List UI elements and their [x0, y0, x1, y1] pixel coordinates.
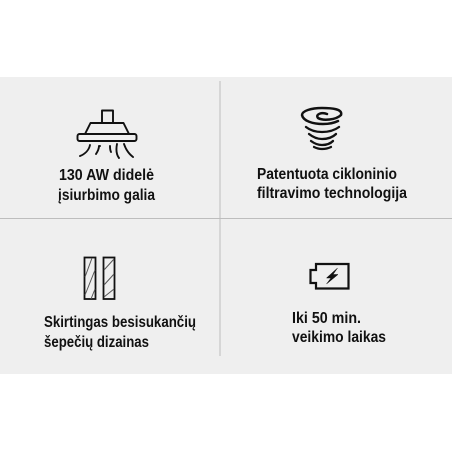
- icon: battery: [310, 264, 348, 288]
- heading: suction power: 130 AW didelė: [59, 167, 154, 184]
- panel: suction power: [58, 110, 155, 204]
- heading: cyclonic filtration: filtravimo technologija: [257, 185, 407, 202]
- heading: brush design: Skirtingas besisukančių: [44, 314, 196, 331]
- icon: vacuum head: [78, 110, 136, 158]
- heading: runtime: veikimo laikas: [292, 329, 386, 346]
- heading: runtime: [292, 310, 386, 346]
- heading: runtime: Iki 50 min.: [292, 310, 361, 327]
- horizontal divider: [0, 218, 452, 220]
- icon: brushes: [84, 258, 114, 299]
- heading: brush design: [44, 314, 196, 351]
- icon: cyclone: [302, 108, 341, 149]
- heading: cyclonic filtration: [257, 166, 407, 202]
- panel: brush design: [44, 258, 196, 351]
- heading: cyclonic filtration: Patentuota cikloninio: [257, 166, 397, 183]
- panel: runtime: [292, 264, 386, 346]
- background band: [0, 77, 452, 374]
- heading: suction power: [58, 167, 155, 204]
- panel: cyclonic filtration: [257, 108, 407, 202]
- heading: suction power: įsiurbimo galia: [58, 187, 155, 204]
- heading: brush design: šepečių dizainas: [44, 334, 149, 351]
- vertical divider: [219, 81, 221, 356]
